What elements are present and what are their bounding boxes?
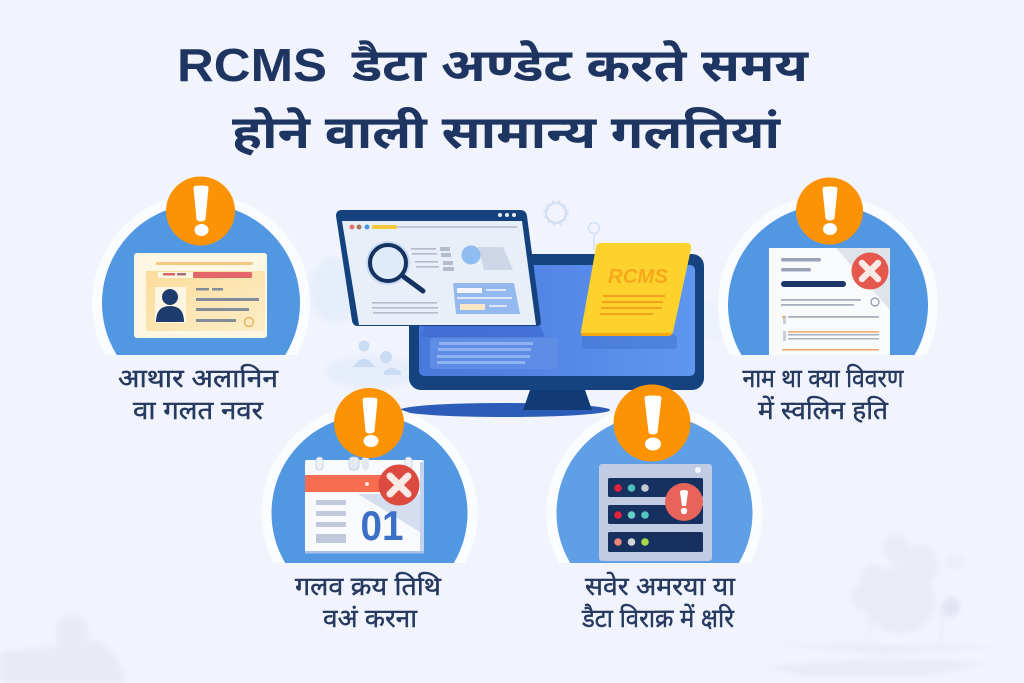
item: wrong date error <box>262 388 478 633</box>
label: गलव क्रय तिथि <box>295 571 441 601</box>
label <box>581 571 736 633</box>
item: name or other details error <box>718 178 938 425</box>
icon: red cross <box>852 252 888 290</box>
magnifier icon <box>366 241 423 291</box>
icon: calendar <box>305 457 424 554</box>
label <box>118 363 279 425</box>
item: server error <box>546 384 762 633</box>
title: डैटा अण्डेट करते समय <box>351 38 809 91</box>
badge ring and blue semicircle <box>92 199 310 355</box>
icon: server rack <box>599 464 712 561</box>
icon: id card <box>134 253 267 338</box>
people silhouette <box>353 340 401 375</box>
background decoration: bottom left silhouette <box>0 614 128 683</box>
background decoration: behind monitor <box>309 256 733 389</box>
icon: red alert <box>665 483 703 521</box>
title <box>177 38 809 158</box>
item: Aadhaar error <box>92 176 310 425</box>
label: वा गलत नवर <box>133 395 264 425</box>
label: वअं करना <box>323 603 418 633</box>
decorative gear and pin <box>544 201 600 250</box>
RCMS document <box>581 243 691 349</box>
title: RCMS <box>177 39 327 91</box>
icon: orange alert <box>796 178 863 244</box>
monitor shadow <box>400 403 610 417</box>
icon: orange alert <box>614 384 690 462</box>
monitor screen <box>419 265 695 376</box>
icon: red cross <box>378 464 420 506</box>
RCMS document: RCMS <box>608 266 669 288</box>
title: होने वाली सामान्य गलतियां <box>232 105 782 158</box>
label: आथार अलानिन <box>118 363 279 393</box>
browser window <box>336 210 541 326</box>
monitor frame <box>409 254 704 390</box>
label: सवेर अमरया या <box>585 571 736 601</box>
label: नाम था क्या विवरण <box>742 363 905 393</box>
icon: document <box>769 248 890 355</box>
icon: orange alert <box>334 388 404 458</box>
label: में स्वलिन हति <box>758 395 889 425</box>
label <box>295 571 441 633</box>
badge ring and blue semicircle <box>546 411 762 563</box>
label: डैटा विराक्र में क्षरि <box>581 603 735 633</box>
background decoration: bottom right trees and water <box>750 533 1024 676</box>
monitor stand <box>523 390 592 410</box>
icon: orange alert <box>166 176 235 246</box>
central illustration: computer with RCMS document <box>336 201 704 417</box>
badge ring and blue semicircle <box>718 200 938 355</box>
icon: calendar: 01 <box>360 502 404 549</box>
label <box>742 363 905 425</box>
badge ring and blue semicircle <box>262 410 478 563</box>
